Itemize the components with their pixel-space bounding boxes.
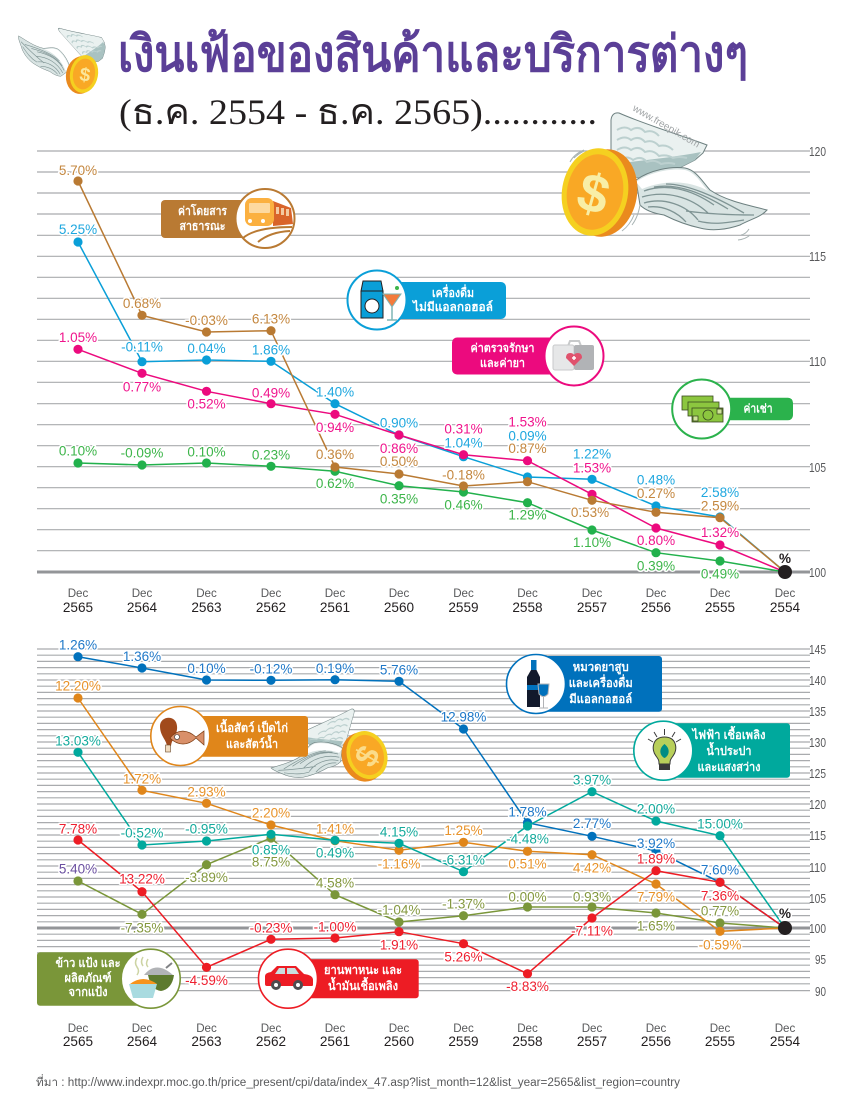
labels: blue series: 5.25% bbox=[59, 222, 97, 237]
labels: olive series: 5.40% bbox=[59, 861, 97, 876]
labels: red series: 7.36% bbox=[701, 888, 739, 903]
icon: lower winged coin bbox=[270, 709, 394, 788]
icon: car bbox=[265, 966, 313, 990]
series: electricity, fuel, water and lighting (teal) bbox=[73, 748, 785, 928]
labels: pink series: 0.31% bbox=[444, 421, 483, 436]
callout: public transport: ค่าโดยสาร bbox=[178, 203, 227, 218]
x axis: top chart: 2560 bbox=[384, 600, 415, 615]
icon: lower winged coin: $ bbox=[347, 739, 387, 773]
labels: teal series: 2.00% bbox=[637, 802, 675, 817]
labels: pink series: 0.49% bbox=[252, 385, 290, 400]
labels: teal series: 4.15% bbox=[380, 825, 418, 840]
x axis: bottom chart: 2562 bbox=[256, 1034, 286, 1049]
labels: green series: 0.10% bbox=[187, 444, 226, 459]
y axis ticks: bottom chart: 115 bbox=[809, 828, 826, 843]
labels: brown series: 0.27% bbox=[637, 486, 675, 501]
x axis: top chart: Dec bbox=[325, 587, 346, 600]
labels: teal series: 0.85% bbox=[252, 843, 290, 858]
labels: teal series: 3.97% bbox=[573, 773, 611, 788]
labels: brown series: 0.36% bbox=[316, 447, 354, 462]
x axis: bottom chart: 2555 bbox=[705, 1034, 735, 1049]
x axis: top chart: Dec bbox=[389, 587, 410, 600]
labels: green series: 0.46% bbox=[444, 497, 483, 512]
labels: dark blue series: 1.26% bbox=[59, 638, 97, 653]
icon: large winged coin: $ bbox=[571, 161, 616, 227]
x axis: bottom chart: Dec bbox=[453, 1022, 474, 1035]
y axis ticks: top chart bbox=[809, 144, 826, 580]
labels: teal series: -0.52% bbox=[121, 825, 163, 840]
labels: olive series: 8.75% bbox=[252, 854, 290, 869]
labels: green series: 1.10% bbox=[573, 535, 611, 550]
labels: blue series bbox=[59, 222, 739, 500]
callout: public transport bbox=[161, 189, 294, 248]
x axis: top chart: Dec bbox=[775, 587, 796, 600]
labels: red series: -0.23% bbox=[250, 921, 292, 936]
labels: olive series: -7.35% bbox=[121, 920, 163, 935]
icon: wine bottle and glass bbox=[527, 660, 549, 708]
callout: tobacco and alcohol: มีแอลกอฮอล์ bbox=[569, 692, 632, 706]
x axis: top chart: 2556 bbox=[641, 600, 671, 615]
callout: electricity, fuel, water and lighting: ไฟฟ้า เชื้อเพลิง bbox=[691, 725, 766, 742]
labels: green series: 0.10% bbox=[59, 443, 97, 458]
labels: blue series: 0.09% bbox=[508, 428, 547, 443]
icon: large winged coin bbox=[555, 103, 767, 242]
labels: red series: 1.91% bbox=[380, 937, 418, 952]
labels: teal series: 13.03% bbox=[55, 733, 101, 748]
x axis: top chart: Dec bbox=[453, 587, 474, 600]
labels: dark blue series: 3.92% bbox=[637, 836, 675, 851]
labels: brown series: 0.68% bbox=[123, 296, 161, 311]
labels: teal series: -6.31% bbox=[442, 853, 485, 868]
x axis: top chart: 2562 bbox=[256, 600, 286, 615]
labels: orange series: -0.59% bbox=[699, 937, 741, 952]
callout: vehicles and fuel: น้ำมันเชื้อเพลิง bbox=[328, 976, 398, 993]
labels: red series bbox=[59, 822, 739, 994]
callout: meat and seafood: เนื้อสัตว์ เป็ดไก่ bbox=[216, 718, 288, 735]
labels: green series: 0.49% bbox=[701, 566, 739, 581]
series: tobacco and alcohol (dark blue) bbox=[73, 652, 785, 928]
series: rent (green) bbox=[73, 458, 785, 572]
labels: blue series: 1.22% bbox=[573, 446, 611, 461]
labels: brown series: 6.13% bbox=[252, 312, 290, 327]
labels: teal series: 15.00% bbox=[697, 816, 743, 831]
x axis: bottom chart: Dec bbox=[646, 1022, 667, 1035]
x axis: bottom chart: Dec bbox=[582, 1022, 603, 1035]
labels: orange series: 1.41% bbox=[316, 822, 354, 837]
icon: milk carton and glass bbox=[361, 281, 401, 320]
x axis: bottom chart: 2559 bbox=[448, 1034, 479, 1049]
x axis: top chart: 2563 bbox=[191, 600, 222, 615]
y axis ticks: top chart: 105 bbox=[809, 460, 826, 475]
x axis: bottom chart: Dec bbox=[196, 1022, 217, 1035]
callout: vehicles and fuel: ยานพาหนะ และ bbox=[324, 963, 402, 977]
labels: blue series: 2.58% bbox=[701, 485, 739, 500]
callout: rice, flour and products bbox=[37, 949, 180, 1008]
callout: non-alcoholic beverages bbox=[348, 270, 506, 330]
x axis: top chart: Dec bbox=[646, 587, 667, 600]
percent sign: top chart: % bbox=[779, 551, 791, 566]
labels: brown series: 0.53% bbox=[571, 505, 609, 520]
x axis: top chart: 2557 bbox=[577, 600, 607, 615]
y axis ticks: bottom chart: 95 bbox=[815, 952, 826, 967]
labels: pink series: 0.52% bbox=[187, 396, 226, 411]
labels: red series: 1.89% bbox=[637, 852, 675, 867]
percent sign: bottom chart: % bbox=[779, 906, 791, 921]
labels: dark blue series: 2.77% bbox=[573, 816, 611, 831]
labels: dark blue series: 0.10% bbox=[187, 661, 226, 676]
y axis ticks: bottom chart: 90 bbox=[815, 984, 826, 999]
labels: green series: -0.09% bbox=[121, 446, 163, 461]
x axis: top chart: Dec bbox=[582, 587, 603, 600]
labels: dark blue series: 12.98% bbox=[441, 709, 486, 724]
callout: tobacco and alcohol: หมวดยาสูบ bbox=[573, 660, 629, 675]
callout: rice, flour and products: ข้าว แป้ง และ bbox=[56, 956, 120, 970]
chart: bottom inflation chart bbox=[37, 638, 826, 1049]
x axis: top chart: Dec bbox=[132, 587, 153, 600]
x axis: top chart: Dec bbox=[261, 587, 282, 600]
y axis ticks: bottom chart: 145 bbox=[809, 642, 826, 657]
labels: dark blue series: 1.36% bbox=[123, 649, 161, 664]
labels: brown series: -0.03% bbox=[185, 313, 228, 328]
series: public transport (brown) bbox=[73, 176, 785, 572]
subtitle: (ธ.ค. 2554 - ธ.ค. 2565)............ bbox=[119, 92, 597, 132]
labels: green series: 0.23% bbox=[252, 447, 290, 462]
labels: pink series bbox=[59, 330, 739, 548]
labels: red series: -8.83% bbox=[506, 979, 549, 994]
x axis: bottom chart: Dec bbox=[325, 1022, 346, 1035]
x axis: bottom chart: Dec bbox=[68, 1022, 89, 1035]
y axis ticks: top chart: 115 bbox=[809, 249, 826, 264]
x axis: bottom chart: Dec bbox=[710, 1022, 731, 1035]
callout: medical care: และค่ายา bbox=[480, 356, 525, 370]
x axis: bottom chart: 2561 bbox=[320, 1034, 350, 1049]
y axis ticks: bottom chart: 130 bbox=[809, 735, 826, 750]
icon: small winged coin (title) bbox=[12, 20, 118, 96]
labels: red series: -1.00% bbox=[314, 920, 356, 935]
x axis: bottom chart: 2558 bbox=[512, 1034, 543, 1049]
title: เงินเฟ้อของสินค้าและบริการต่างๆ bbox=[118, 26, 748, 82]
icon: small winged coin (title): $ bbox=[78, 64, 92, 87]
labels: red series: -4.59% bbox=[185, 973, 228, 988]
labels: orange series: 1.25% bbox=[444, 823, 483, 838]
x axis: bottom chart: 2556 bbox=[641, 1034, 671, 1049]
series: medical care (pink) bbox=[73, 345, 785, 572]
callout: public transport: สาธารณะ bbox=[180, 219, 226, 233]
x axis: bottom chart: Dec bbox=[261, 1022, 282, 1035]
labels: blue series: 1.86% bbox=[252, 342, 290, 357]
x axis: top chart: 2564 bbox=[127, 600, 158, 615]
labels: dark blue series bbox=[59, 638, 739, 877]
callout: non-alcoholic beverages: ไม่มีแอลกอฮอล์ bbox=[411, 299, 493, 314]
y axis ticks: bottom chart: 100 bbox=[809, 921, 826, 936]
labels: red series: 5.26% bbox=[444, 950, 483, 965]
x axis: bottom chart: Dec bbox=[132, 1022, 153, 1035]
labels: dark blue series: 1.78% bbox=[508, 804, 547, 819]
labels: green series: 0.39% bbox=[637, 559, 675, 574]
series: vehicles and fuel (red) bbox=[73, 835, 785, 978]
y axis ticks: top chart: 110 bbox=[809, 354, 826, 369]
labels: orange series: 12.20% bbox=[55, 678, 101, 693]
labels: dark blue series: -0.12% bbox=[250, 661, 292, 676]
labels: olive series: -1.37% bbox=[442, 896, 485, 911]
labels: olive series: 0.00% bbox=[508, 890, 547, 905]
icon: banknotes bbox=[682, 396, 723, 422]
x axis: bottom chart: 2554 bbox=[770, 1034, 801, 1049]
source line: ที่มา : http://www.indexpr.moc.go.th/price_present/cpi/data/index_47.asp?list_month=12&list_year=2565&list_region=country bbox=[36, 1074, 680, 1089]
labels: pink series: 1.32% bbox=[701, 525, 739, 540]
labels: blue series: 1.40% bbox=[316, 384, 354, 399]
callout: rent bbox=[672, 380, 793, 438]
callout: medical care bbox=[452, 326, 604, 386]
labels: teal series: -0.95% bbox=[185, 821, 228, 836]
labels: olive series: 0.77% bbox=[701, 903, 739, 918]
labels: dark blue series: 7.60% bbox=[701, 862, 739, 877]
labels: orange series: 2.93% bbox=[187, 785, 226, 800]
labels: green series: 1.29% bbox=[508, 507, 547, 522]
callout: electricity, fuel, water and lighting bbox=[634, 721, 790, 780]
labels: pink series: 0.77% bbox=[123, 379, 161, 394]
callout: vehicles and fuel bbox=[258, 949, 419, 1008]
x axis: top chart: 2561 bbox=[320, 600, 350, 615]
callout: rice, flour and products: ผลิตภัณฑ์ bbox=[64, 971, 112, 985]
series: rice and flour (olive) bbox=[73, 833, 785, 928]
x axis: top chart: Dec bbox=[710, 587, 731, 600]
labels: orange series bbox=[55, 678, 741, 952]
callout: tobacco and alcohol bbox=[506, 654, 662, 714]
x axis: top chart bbox=[63, 587, 801, 615]
labels: olive series: -1.04% bbox=[378, 902, 420, 917]
labels: olive series bbox=[59, 854, 739, 935]
x axis: top chart: Dec bbox=[517, 587, 538, 600]
labels: pink series: 1.53% bbox=[573, 460, 611, 475]
labels: teal series: 0.49% bbox=[316, 845, 354, 860]
labels: pink series: 1.05% bbox=[59, 330, 97, 345]
icon: chicken leg and fish bbox=[160, 718, 204, 752]
callout: medical care: ค่าตรวจรักษา bbox=[470, 341, 534, 355]
callout: meat and seafood bbox=[151, 706, 308, 766]
icon: light bulb bbox=[648, 729, 681, 770]
x axis: top chart: 2554 bbox=[770, 600, 801, 615]
icon: food bowls bbox=[129, 957, 174, 998]
x axis: bottom chart: Dec bbox=[389, 1022, 410, 1035]
callout: electricity, fuel, water and lighting: และแสงสว่าง bbox=[698, 760, 761, 774]
x axis: bottom chart: 2563 bbox=[191, 1034, 222, 1049]
callout: tobacco and alcohol: และเครื่องดื่ม bbox=[569, 674, 633, 690]
labels: red series: -7.11% bbox=[571, 923, 613, 938]
x axis: bottom chart: Dec bbox=[517, 1022, 538, 1035]
icon: first aid case bbox=[553, 341, 594, 370]
y axis ticks: bottom chart: 120 bbox=[809, 797, 826, 812]
labels: red series: 13.22% bbox=[119, 872, 165, 887]
labels: orange series: 4.42% bbox=[573, 860, 611, 875]
labels: dark blue series: 5.76% bbox=[380, 663, 418, 678]
labels: orange series: -1.16% bbox=[378, 857, 420, 872]
labels: olive series: 1.65% bbox=[637, 919, 675, 934]
labels: brown series: 0.50% bbox=[380, 454, 418, 469]
chart: top inflation chart bbox=[37, 144, 826, 615]
labels: pink series: 0.80% bbox=[637, 533, 675, 548]
labels: blue series: 0.90% bbox=[380, 415, 418, 430]
x axis: bottom chart: 2564 bbox=[127, 1034, 158, 1049]
labels: blue series: 0.04% bbox=[187, 341, 226, 356]
labels: blue series: 0.48% bbox=[637, 472, 675, 487]
x axis: top chart: 2558 bbox=[512, 600, 543, 615]
y axis ticks: bottom chart bbox=[809, 642, 826, 999]
y axis ticks: bottom chart: 125 bbox=[809, 766, 826, 781]
x axis: bottom chart: 2557 bbox=[577, 1034, 607, 1049]
labels: pink series: 0.86% bbox=[380, 441, 418, 456]
x axis: top chart: Dec bbox=[68, 587, 89, 600]
icon: train bbox=[243, 198, 293, 242]
labels: brown series: 0.87% bbox=[508, 441, 547, 456]
labels: brown series: 2.59% bbox=[701, 499, 739, 514]
labels: pink series: 0.94% bbox=[316, 420, 354, 435]
labels: orange series: 2.20% bbox=[252, 806, 290, 821]
callout: meat and seafood: และสัตว์น้ำ bbox=[226, 734, 278, 751]
x axis: top chart: Dec bbox=[196, 587, 217, 600]
callout: electricity, fuel, water and lighting: น้ำประปา bbox=[706, 741, 752, 758]
x axis: bottom chart: Dec bbox=[775, 1022, 796, 1035]
y axis ticks: bottom chart: 135 bbox=[809, 704, 826, 719]
labels: green series: 0.62% bbox=[316, 476, 354, 491]
labels: olive series: 4.58% bbox=[316, 875, 354, 890]
y axis ticks: top chart: 120 bbox=[809, 144, 826, 159]
series: meat and seafood (orange) bbox=[73, 693, 785, 936]
y axis ticks: bottom chart: 140 bbox=[809, 673, 826, 688]
labels: teal series: -4.48% bbox=[506, 832, 549, 847]
x axis: top chart: 2565 bbox=[63, 600, 93, 615]
labels: green series bbox=[59, 443, 739, 581]
watermark: www.freepik.com bbox=[630, 103, 701, 150]
callout: non-alcoholic beverages: เครื่องดื่ม bbox=[432, 284, 474, 300]
labels: red series: 7.78% bbox=[59, 822, 97, 837]
labels: pink series: 1.53% bbox=[508, 414, 547, 429]
x axis: bottom chart bbox=[63, 1022, 801, 1049]
labels: brown series: -0.18% bbox=[442, 468, 485, 483]
labels: olive series: 0.93% bbox=[573, 890, 611, 905]
base point: bottom chart bbox=[778, 921, 792, 935]
x axis: top chart: 2559 bbox=[448, 600, 479, 615]
y axis ticks: top chart: 100 bbox=[809, 565, 826, 580]
y axis ticks: bottom chart: 110 bbox=[809, 860, 826, 875]
labels: orange series: 7.79% bbox=[637, 890, 675, 905]
callout: rice, flour and products: จากแป้ง bbox=[68, 985, 108, 999]
labels: teal series bbox=[55, 733, 743, 868]
labels: brown series bbox=[59, 163, 739, 520]
callout: rent: ค่าเช่า bbox=[744, 402, 772, 416]
labels: brown series: 5.70% bbox=[59, 163, 97, 178]
labels: dark blue series: 0.19% bbox=[316, 661, 354, 676]
y axis ticks: bottom chart: 105 bbox=[809, 891, 826, 906]
labels: orange series: 0.51% bbox=[508, 856, 547, 871]
x axis: bottom chart: 2560 bbox=[384, 1034, 415, 1049]
labels: blue series: -0.11% bbox=[121, 340, 163, 355]
base point: top chart bbox=[778, 565, 792, 579]
x axis: bottom chart: 2565 bbox=[63, 1034, 93, 1049]
labels: green series: 0.35% bbox=[380, 491, 418, 506]
labels: blue series: 1.04% bbox=[444, 436, 483, 451]
labels: orange series: 1.72% bbox=[123, 771, 161, 786]
series: non-alcoholic beverages (blue) bbox=[73, 237, 785, 572]
x axis: top chart: 2555 bbox=[705, 600, 735, 615]
labels: olive series: -3.89% bbox=[185, 870, 228, 885]
